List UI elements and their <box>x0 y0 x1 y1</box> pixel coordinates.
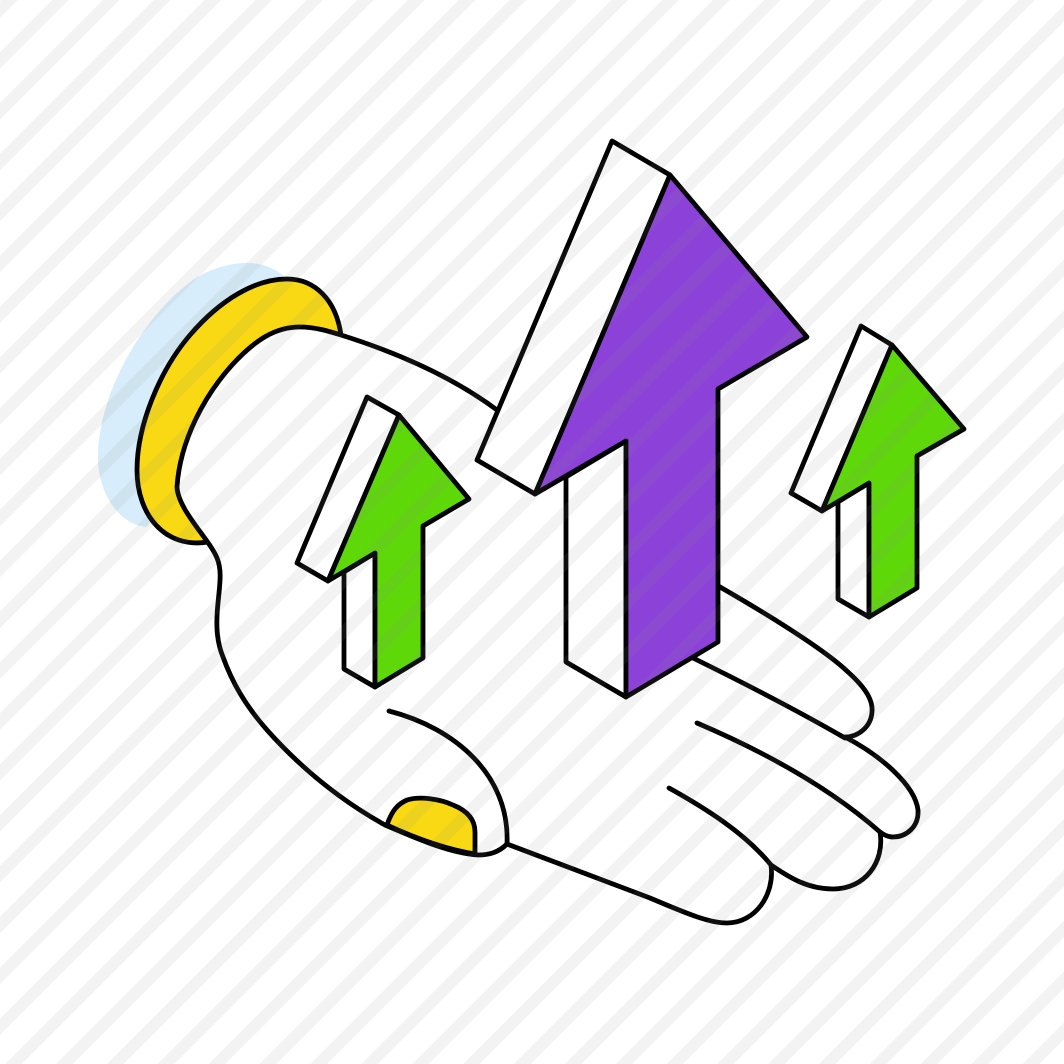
arrowhead side face <box>791 326 892 511</box>
hand outline <box>177 327 918 923</box>
thumb line <box>389 711 507 844</box>
green front face <box>822 345 964 617</box>
yellow cuff <box>137 279 341 543</box>
finger line 3 <box>669 788 771 865</box>
shaft side face <box>838 483 869 617</box>
blue shadow behind cuff <box>98 263 285 527</box>
shaft side face <box>344 553 375 687</box>
finger line 1 <box>693 658 845 738</box>
finger line 2 <box>697 723 880 832</box>
arrowhead side face <box>477 141 670 494</box>
shaft side face <box>566 441 626 697</box>
green front face <box>328 415 469 687</box>
hand <box>177 327 918 923</box>
yellow thumbnail <box>387 798 475 854</box>
left green arrow <box>297 397 469 687</box>
arrowhead side face <box>297 397 399 581</box>
large purple arrow <box>477 141 807 697</box>
right green arrow <box>791 326 964 617</box>
purple front face <box>535 175 807 697</box>
